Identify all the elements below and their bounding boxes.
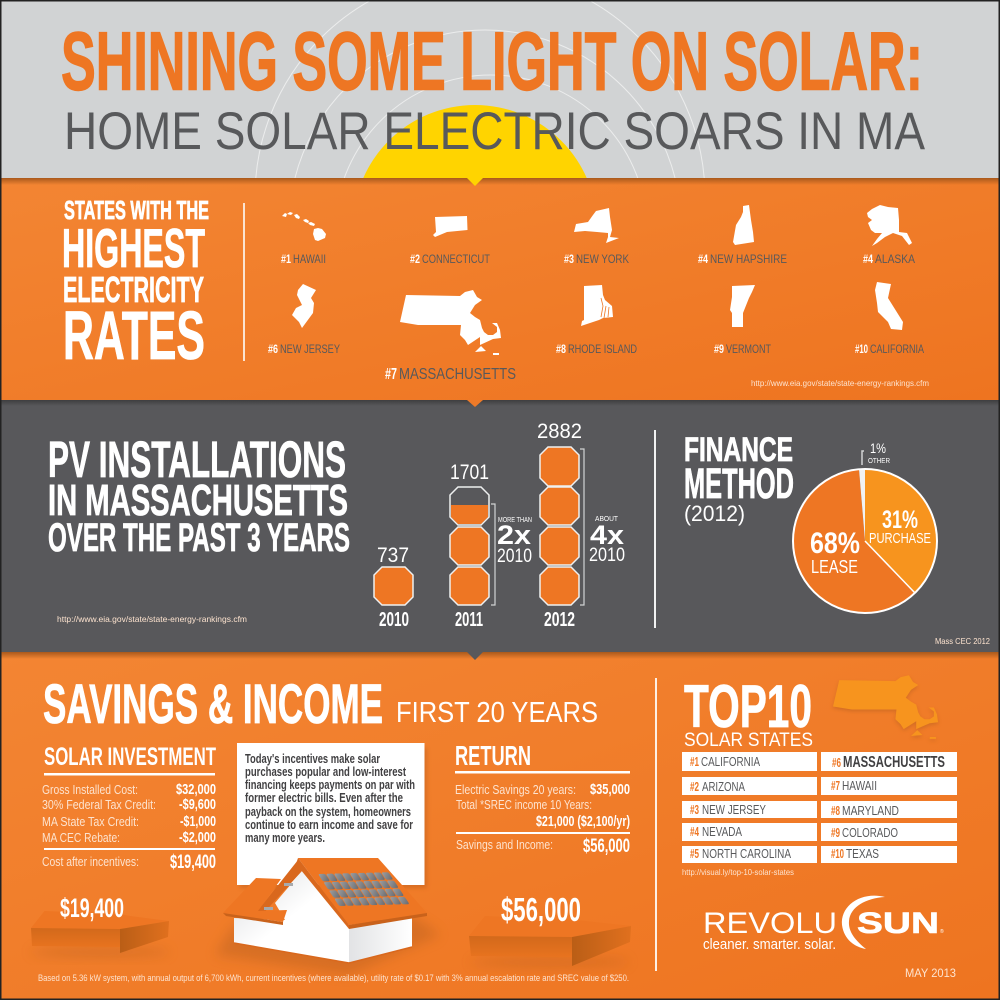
state: Massachusetts <box>385 290 516 383</box>
state: Hawaii: #1 <box>281 252 291 266</box>
table: solar investment: -$9,600 <box>179 796 216 813</box>
state: New Jersey: #6 <box>268 342 278 356</box>
list: top 10 solar states: #4 <box>690 824 699 839</box>
text box: former electric bills. Even after the <box>245 790 403 805</box>
label: other 1%: 1% <box>870 440 886 456</box>
heading: PV installations <box>48 431 350 560</box>
state: Vermont: VERMONT <box>726 342 772 356</box>
heading: savings and income: SAVINGS & INCOME <box>43 672 383 735</box>
logo: RevoluSun: ® <box>940 928 944 935</box>
heading: savings and income: FIRST 20 YEARS <box>396 697 598 729</box>
years: 2011 <box>455 609 483 631</box>
table: solar investment: 30% Federal Tax Credit: <box>42 797 156 812</box>
table: return: Savings and Income: <box>456 837 553 852</box>
list: top 10 solar states: COLORADO <box>842 825 898 840</box>
bar: 2012 <box>540 567 579 605</box>
icon: house with solar panels <box>215 858 440 975</box>
text box: purchases popular and low-interest <box>245 764 406 779</box>
table: solar investment: Gross Installed Cost: <box>42 782 138 797</box>
state: New York <box>564 208 629 266</box>
label: lease 68% <box>810 527 860 577</box>
state: Massachusetts: MASSACHUSETTS <box>399 366 516 383</box>
state: Rhode Island: RHODE ISLAND <box>568 342 637 356</box>
bar: 2011 bottom <box>450 567 489 605</box>
arrow: cost <box>30 893 170 957</box>
table: solar investment: SOLAR INVESTMENT <box>44 743 216 771</box>
list: top 10 solar states: #3 <box>690 802 699 817</box>
values: 1701 <box>450 461 489 484</box>
values: 2882 <box>537 420 582 443</box>
list: top 10 solar states: #8 <box>831 803 840 818</box>
list: top 10 solar states: TEXAS <box>846 846 879 861</box>
panel: PV installations and finance <box>0 400 1000 653</box>
text box: many more years. <box>245 830 325 845</box>
list: top 10 solar states: #7 <box>831 778 840 793</box>
label: purchase 31%: 31% <box>882 506 918 534</box>
chart: finance method pie <box>793 440 937 613</box>
state: New Hampshire <box>698 205 787 266</box>
icon: sun <box>363 105 587 178</box>
table: solar investment <box>42 743 216 873</box>
table: return: $56,000 <box>583 836 630 857</box>
solar panels <box>318 872 410 906</box>
heading: PV installations: IN MASSACHUSETTS <box>48 476 348 525</box>
state: Vermont <box>714 285 772 356</box>
text box: payback on the system, homeowners <box>245 804 411 819</box>
state: California: #10 <box>855 342 868 356</box>
state: New York: NEW YORK <box>576 252 629 266</box>
heading: top 10 solar states: TOP10 <box>684 673 812 740</box>
heading: finance method: METHOD <box>684 460 794 508</box>
callout: about 4x 2010 <box>589 514 625 566</box>
state: Massachusetts: #7 <box>385 366 397 383</box>
arrow: return <box>469 891 631 967</box>
values: 737 <box>377 544 409 567</box>
panel: header <box>2 2 998 178</box>
callout: more than 2x 2010 <box>497 515 532 567</box>
list: top 10 solar states: NEVADA <box>702 824 742 839</box>
state: New York: #3 <box>564 252 574 266</box>
list: top 10 solar states: #9 <box>831 825 840 840</box>
state: Connecticut <box>410 216 491 266</box>
table: return: RETURN <box>455 740 531 771</box>
icon: Massachusetts map <box>833 675 938 741</box>
source: Mass CEC 2012 <box>935 636 990 646</box>
value: $19,400 <box>60 893 124 923</box>
rings around sun <box>255 2 705 178</box>
years: 2012 <box>544 609 575 631</box>
state: Hawaii <box>281 212 326 266</box>
text box: financing keeps payments on par with <box>245 777 415 792</box>
values <box>377 420 582 567</box>
label: lease 68%: 68% <box>810 527 860 560</box>
heading: PV installations: PV INSTALLATIONS <box>48 431 346 488</box>
table: return: Electric Savings 20 years: <box>455 782 576 797</box>
list: top 10 solar states: NORTH CAROLINA <box>702 846 791 861</box>
table: solar investment: -$1,000 <box>180 813 216 830</box>
list: top 10 solar states: #2 <box>690 779 699 794</box>
list: top 10 solar states: ARIZONA <box>702 779 745 794</box>
logo: RevoluSun: cleaner. smarter. solar. <box>703 936 836 953</box>
state: New Hampshire: #4 <box>698 252 708 266</box>
text box <box>237 743 427 888</box>
list: top 10 solar states: #1 <box>690 754 699 769</box>
heading: PV installations: OVER THE PAST 3 YEARS <box>48 516 350 560</box>
list: top 10 solar states <box>682 752 957 863</box>
logo: RevoluSun: SUN <box>857 907 939 940</box>
state: Alaska <box>863 205 915 266</box>
list: top 10 solar states: MARYLAND <box>842 803 899 818</box>
callout: about 4x 2010: ABOUT <box>595 514 618 523</box>
state: Connecticut: CONNECTICUT <box>422 252 491 266</box>
table: return: $35,000 <box>590 781 630 798</box>
state: New Jersey <box>268 284 340 356</box>
source url: http://www.eia.gov/state/state-energy-rankings.cfm <box>751 378 929 388</box>
footnote: Based on 5.36 kW system, with annual output of 6,700 kWh, current incentives (where available), utility rate of $0.17 with 3% annual escalation rate and SREC value of $250. <box>38 973 629 984</box>
list: top 10 solar states: #5 <box>690 846 699 861</box>
table: solar investment: MA CEC Rebate: <box>42 830 120 845</box>
value: $56,000 <box>501 891 581 928</box>
source url: http://www.eia.gov/state/state-energy-rankings.cfm <box>57 614 247 624</box>
table: return: Total *SREC income 10 Years: <box>456 797 592 812</box>
heading: top 10 solar states <box>684 673 813 751</box>
heading: states with the highest electricity rates: HIGHEST <box>62 217 205 279</box>
logo: RevoluSun <box>703 896 944 953</box>
panel: savings and income <box>0 652 1000 1000</box>
text box: Today's incentives make solar <box>245 751 380 766</box>
state: California <box>855 282 924 356</box>
years <box>379 609 575 631</box>
callout: more than 2x 2010: 2x <box>497 520 531 550</box>
heading: finance method: (2012) <box>684 501 745 526</box>
state: Alaska: #4 <box>863 252 873 266</box>
source url: http://visual.ly/top-10-solar-states <box>682 867 794 877</box>
table: return: $21,000 ($2,100/yr) <box>536 813 630 830</box>
heading: states with the highest electricity rates: RATES <box>63 297 205 374</box>
state: Connecticut: #2 <box>410 252 420 266</box>
callout: about 4x 2010: 2010 <box>589 545 625 566</box>
list: top 10 solar states: #6 <box>832 755 841 770</box>
state: New Jersey: NEW JERSEY <box>280 342 340 356</box>
label: other 1% <box>868 440 890 465</box>
table: solar investment: MA State Tax Credit: <box>42 814 139 829</box>
logo: RevoluSun: REVOLU <box>703 907 837 940</box>
state: Vermont: #9 <box>714 342 724 356</box>
heading: top 10 solar states: SOLAR STATES <box>684 730 813 751</box>
text box: continue to earn income and save for <box>245 817 413 832</box>
list: top 10 solar states: MASSACHUSETTS <box>843 754 945 771</box>
list: top 10 solar states: HAWAII <box>842 778 877 793</box>
table: return <box>455 740 630 857</box>
callout: more than 2x 2010: MORE THAN <box>498 515 532 524</box>
state: Hawaii: HAWAII <box>293 252 326 266</box>
table: solar investment: $19,400 <box>170 852 216 873</box>
state: New Hampshire: NEW HAPSHIRE <box>710 252 787 266</box>
table: solar investment: $32,000 <box>176 781 216 798</box>
callout: about 4x 2010: 4x <box>590 520 624 550</box>
list: top 10 solar states: #10 <box>831 846 844 861</box>
date: MAY 2013 <box>905 966 956 980</box>
table: solar investment: Cost after incentives: <box>42 854 139 869</box>
heading: states with the highest electricity rates <box>62 195 209 374</box>
label: other 1%: OTHER <box>868 458 890 465</box>
heading: finance method <box>684 431 794 526</box>
list: top 10 solar states: CALIFORNIA <box>701 754 760 769</box>
list: top 10 solar states: NEW JERSEY <box>702 802 766 817</box>
label: purchase 31% <box>869 506 931 547</box>
label: purchase 31%: PURCHASE <box>869 530 931 547</box>
chart: PV installations pictogram <box>374 420 625 631</box>
heading: states with the highest electricity rates: STATES WITH THE <box>64 195 209 225</box>
state: Alaska: ALASKA <box>875 252 915 266</box>
state: California: CALIFORNIA <box>870 342 924 356</box>
bar: 2010 <box>374 567 413 605</box>
label: lease 68%: LEASE <box>811 557 858 577</box>
heading: states with the highest electricity rates: ELECTRICITY <box>63 269 204 310</box>
table: solar investment: -$2,000 <box>179 829 216 846</box>
state: Rhode Island: #8 <box>556 342 566 356</box>
callout: more than 2x 2010: 2010 <box>497 546 532 567</box>
state: Rhode Island <box>556 285 637 356</box>
heading: finance method: FINANCE <box>684 431 793 469</box>
years: 2010 <box>379 609 409 631</box>
panel: highest electricity rates <box>0 178 1000 401</box>
